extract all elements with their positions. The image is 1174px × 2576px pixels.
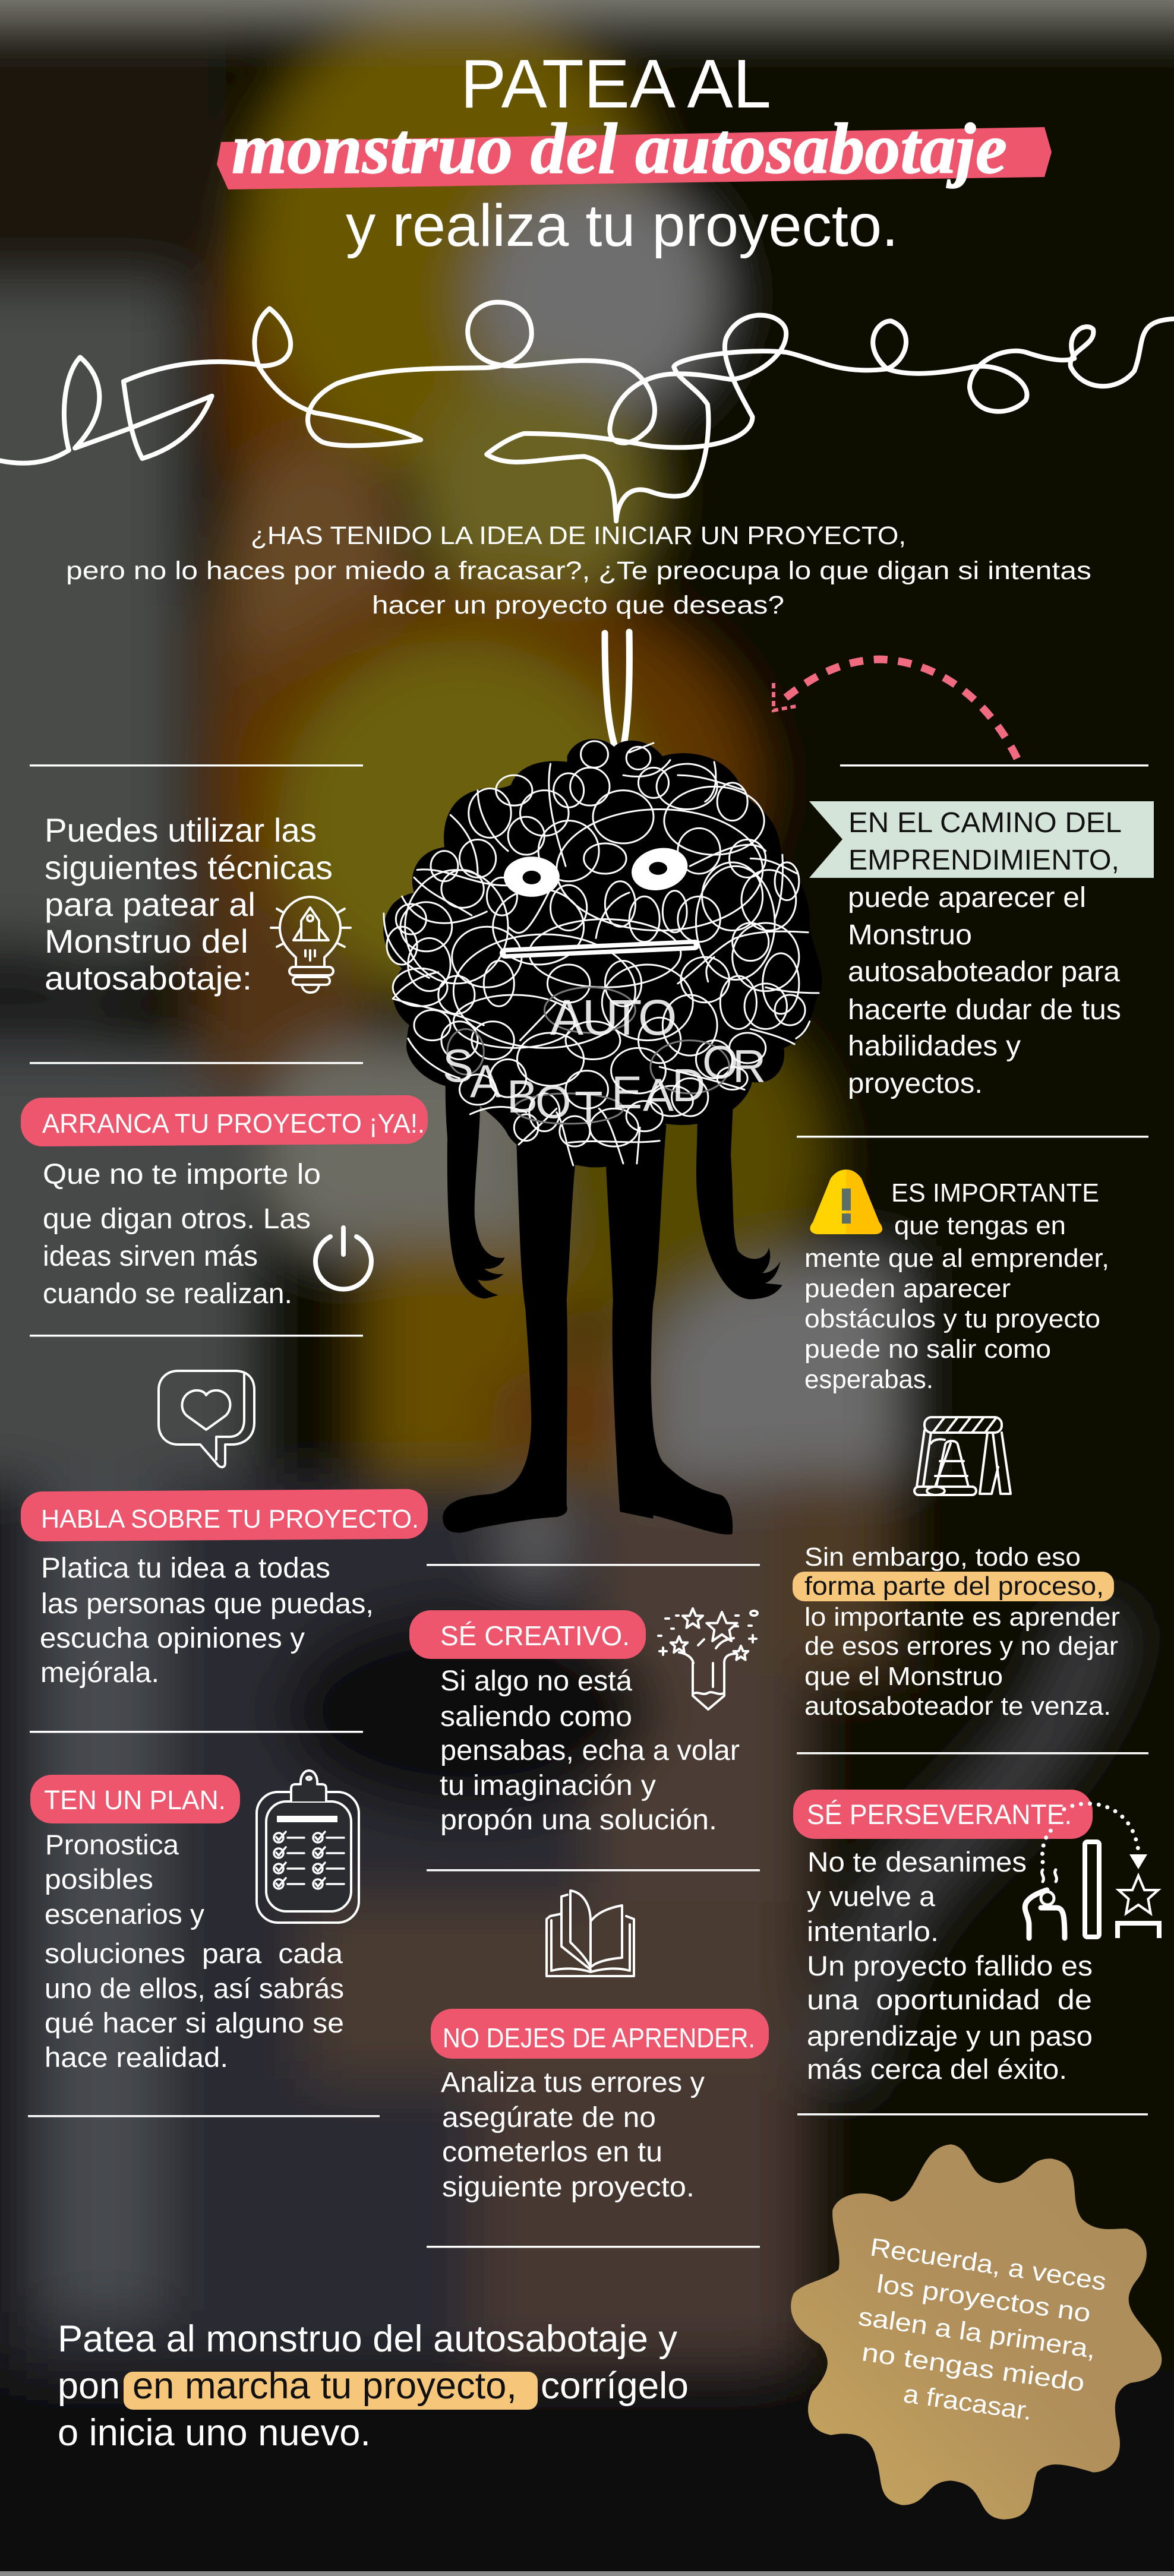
blob text: a fracasar. (902, 2379, 1034, 2426)
heading pill (21, 1095, 428, 1146)
panel: se perseverante (793, 1790, 1159, 2085)
body text: Analiza tus errores y (441, 2067, 705, 2098)
body text (45, 1829, 344, 2073)
body text (807, 1846, 1093, 2085)
body text: que digan otros. Las (43, 1203, 311, 1235)
monster (383, 632, 822, 1534)
body text: autosaboteador te venza. (804, 1692, 1111, 1721)
body text (43, 1159, 321, 1310)
intro text: siguientes técnicas (45, 849, 333, 886)
ribbon text: EMPRENDIMIENTO, (848, 845, 1119, 876)
monster label: AUTO (550, 990, 677, 1045)
panel: habla sobre tu proyecto (21, 1371, 428, 1689)
body text: que el Monstruo (804, 1662, 1003, 1691)
monster mouth (505, 945, 695, 953)
heading text: HABLA SOBRE TU PROYECTO. (41, 1504, 419, 1534)
heading pill (409, 1610, 646, 1659)
panel: closing statement: pon (58, 2365, 120, 2407)
icon: warning triangle (810, 1170, 882, 1234)
body text: saliendo como (440, 1701, 632, 1733)
blob shadow (782, 2155, 1153, 2530)
body text (793, 1543, 1120, 1721)
heading pill (30, 1775, 240, 1823)
blob text (857, 2233, 1108, 2426)
body text: Un proyecto fallido es (807, 1950, 1093, 1981)
monster body (383, 739, 822, 1167)
monster grey scribble (447, 987, 730, 1124)
highlighted text: en marcha tu proyecto, (132, 2365, 517, 2407)
body text: Platica tu idea a todas (41, 1553, 330, 1584)
body text: esperabas. (804, 1365, 933, 1394)
body text: escucha opiniones y (40, 1623, 305, 1654)
title highlight bar (217, 127, 1052, 189)
panel: es importante (793, 1170, 1120, 1721)
blob text: los proyectos no (875, 2270, 1093, 2328)
heading pill (793, 1790, 1093, 1839)
monster label: SABOTEADOR (443, 1036, 766, 1134)
monster scribble (384, 741, 819, 1165)
panel: arranca tu proyecto (21, 1095, 428, 1310)
body text (440, 1665, 740, 1836)
bottom strip (0, 2571, 1174, 2576)
body text: proyectos. (848, 1068, 983, 1099)
body text: uno de ellos, así sabrás (45, 1973, 344, 2004)
body text: asegúrate de no (442, 2102, 656, 2134)
panel: ten un plan (30, 1771, 359, 2073)
icon: rocket light bulb (271, 897, 351, 993)
body text: mente que al emprender, (804, 1244, 1109, 1273)
body text: Monstruo (848, 919, 972, 951)
heading pill (21, 1489, 428, 1541)
body text: hace realidad. (45, 2041, 228, 2073)
body text: cometerlos en tu (442, 2136, 662, 2168)
body text: obstáculos y tu proyecto (804, 1304, 1100, 1333)
body text (40, 1553, 374, 1689)
body text: que tengas en (894, 1211, 1066, 1240)
heading text: ARRANCA TU PROYECTO ¡YA!. (42, 1108, 425, 1139)
body text: mejórala. (40, 1657, 159, 1689)
panel: closing statement: corrígelo (541, 2365, 689, 2407)
panel: reminder blob (782, 2144, 1162, 2530)
body text: hacerte dudar de tus (848, 994, 1121, 1026)
body text: aprendizaje y un paso (807, 2020, 1093, 2052)
intro text: Monstruo del (45, 922, 248, 960)
heading text: SÉ PERSEVERANTE. (807, 1799, 1072, 1830)
intro text: para patear al (45, 886, 255, 923)
body text: tu imaginación y (440, 1770, 656, 1801)
panel: closing statement: Patea al monstruo del autosabotaje y (58, 2318, 677, 2360)
body text: lo importante es aprender (804, 1603, 1120, 1632)
monster label (443, 990, 766, 1134)
body text: más cerca del éxito. (807, 2053, 1067, 2085)
body text: propón una solución. (440, 1804, 717, 1836)
title (217, 45, 1052, 259)
blob text: Recuerda, a veces (869, 2233, 1108, 2296)
icon: person, wall and star (1025, 1804, 1159, 1938)
body text (441, 2067, 705, 2203)
body text: las personas que puedas, (41, 1588, 374, 1620)
panel: closing statement: o inicia uno nuevo. (58, 2412, 371, 2454)
body text: habilidades y (848, 1031, 1021, 1062)
monster legs and arms (443, 1073, 782, 1534)
monster left eye (504, 856, 560, 897)
body text: Sin embargo, todo eso (804, 1543, 1081, 1572)
body text: y vuelve a (807, 1880, 936, 1912)
body text (848, 882, 1121, 1099)
body text: Que no te importe lo (43, 1159, 321, 1190)
icon: open book (547, 1891, 634, 1976)
intro question text: ¿HAS TENIDO LA IDEA DE INICIAR UN PROYECTO, (251, 521, 906, 550)
dashed arrow (774, 659, 1017, 758)
intro text: Puedes utilizar las (45, 811, 317, 849)
blob shape (791, 2144, 1162, 2520)
blob text: salen a la primera, (857, 2302, 1097, 2364)
blob text: no tengas miedo (860, 2338, 1087, 2398)
body text: Pronostica (45, 1829, 179, 1860)
body text: de esos errores y no dejar (804, 1632, 1118, 1661)
title: PATEA AL (460, 45, 771, 122)
body text: puede aparecer el (848, 882, 1086, 914)
intro question text: hacer un proyecto que deseas? (372, 591, 784, 619)
body text: autosaboteador para (848, 956, 1120, 988)
intro question text (66, 521, 1091, 619)
section dividers (28, 764, 1148, 2248)
intro text (45, 811, 333, 997)
body text: una oportunidad de (807, 1984, 1092, 2015)
panel: no dejes de aprender (431, 1891, 769, 2203)
body text: pensabas, echa a volar (440, 1735, 740, 1766)
body text: intentarlo. (807, 1916, 939, 1947)
monster right eye (629, 843, 690, 895)
body text: pueden aparecer (804, 1274, 1011, 1303)
heading pill (431, 2009, 769, 2059)
intro text: autosabotaje: (45, 959, 252, 997)
body text: posibles (45, 1863, 153, 1895)
highlight pill (124, 2372, 538, 2410)
ribbon (809, 801, 1154, 878)
body text: ideas sirven más (43, 1241, 258, 1272)
body text: ES IMPORTANTE (891, 1178, 1099, 1208)
decorative squiggle line (0, 302, 1174, 521)
body text: puede no salir como (804, 1335, 1051, 1364)
title closing line: y realiza tu proyecto. (346, 192, 898, 259)
body text: siguiente proyecto. (442, 2172, 695, 2203)
body text: Si algo no está (440, 1665, 632, 1697)
heading text: NO DEJES DE APRENDER. (443, 2022, 755, 2053)
panel: closing statement (58, 2318, 689, 2454)
body text: No te desanimes (807, 1846, 1027, 1878)
icon: heart speech bubble (159, 1371, 254, 1467)
icon: pencil and stars (658, 1608, 758, 1709)
ribbon text (848, 807, 1122, 876)
icon: clipboard checklist (257, 1771, 359, 1923)
ribbon text: EN EL CAMINO DEL (848, 807, 1122, 839)
body text: cuando se realizan. (43, 1278, 292, 1310)
body text: escenarios y (45, 1898, 204, 1930)
monster hanging strings (605, 632, 629, 761)
icon: road barrier and cone (914, 1417, 1011, 1495)
heading text: SÉ CREATIVO. (440, 1620, 630, 1651)
panel: intro techniques (45, 811, 351, 997)
heading text: TEN UN PLAN. (44, 1785, 226, 1815)
intro question text: pero no lo haces por miedo a fracasar?, ¿Te preocupa lo que digan si intentas (66, 557, 1091, 585)
panel: se creativo (409, 1608, 758, 1836)
highlighted text: forma parte del proceso, (804, 1572, 1104, 1601)
highlight pill (793, 1572, 1114, 1601)
body text: soluciones para cada (45, 1937, 343, 1969)
body text: qué hacer si alguno se (45, 2007, 344, 2038)
body text (804, 1178, 1109, 1394)
title script text: monstruo del autosabotaje (232, 109, 1007, 189)
panel: en el camino del emprendimiento (809, 801, 1154, 1099)
icon: power (315, 1228, 371, 1289)
